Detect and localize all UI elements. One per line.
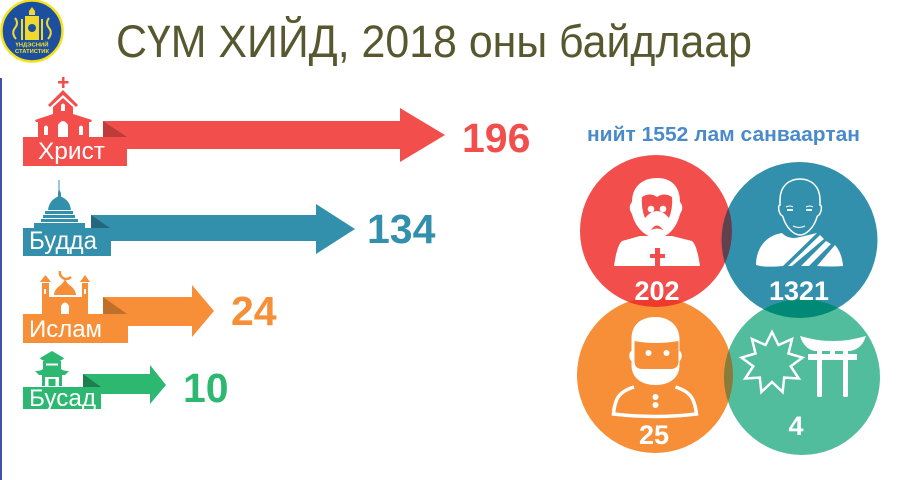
value: 25	[639, 420, 669, 450]
priest group	[614, 178, 700, 306]
total heading: нийт 1552 лам санваартан	[587, 124, 860, 146]
label: Христ	[38, 138, 105, 165]
label ribbon	[23, 314, 128, 343]
value: 134	[367, 206, 436, 252]
fold	[91, 215, 110, 228]
logo	[2, 0, 62, 62]
value: 202	[634, 276, 680, 306]
label: Ислам	[29, 316, 102, 343]
imam group	[614, 317, 696, 450]
label ribbon	[23, 137, 127, 166]
logo: ҮНДЭСНИЙ	[16, 40, 49, 48]
other group	[742, 332, 866, 441]
logo: СТАТИСТИК	[15, 49, 50, 55]
arrow	[91, 204, 355, 254]
value: 196	[462, 115, 530, 161]
value: 10	[183, 365, 229, 411]
label: Будда	[29, 227, 97, 255]
row: Будда	[23, 180, 436, 256]
icon: monk	[756, 179, 843, 267]
row: Бусад	[23, 351, 229, 412]
value: 4	[788, 411, 804, 441]
icon: imam	[614, 317, 696, 416]
label: Бусад	[29, 385, 96, 412]
value: 1321	[769, 276, 829, 306]
left edge line	[0, 78, 2, 480]
icon: star	[742, 332, 802, 392]
icon: stupa	[34, 180, 85, 228]
arrow	[83, 365, 166, 404]
label ribbon	[23, 387, 101, 409]
label ribbon	[23, 228, 111, 256]
fold	[83, 374, 101, 387]
value: 24	[231, 288, 277, 334]
icon: torii	[800, 336, 866, 397]
fold	[103, 297, 127, 314]
title: СҮМ ХИЙД, 2018 оны байдлаар	[116, 16, 752, 68]
icon: mosque	[40, 271, 90, 314]
monk group	[756, 179, 843, 306]
icon: priest	[614, 178, 700, 267]
row: Ислам	[23, 271, 277, 343]
arrow	[103, 285, 214, 337]
fold	[103, 121, 127, 137]
arrow	[103, 108, 445, 162]
row: Христ	[23, 77, 530, 166]
icon: pagoda	[35, 351, 69, 386]
circles with overlaps	[577, 155, 880, 455]
icon: church	[35, 77, 92, 137]
